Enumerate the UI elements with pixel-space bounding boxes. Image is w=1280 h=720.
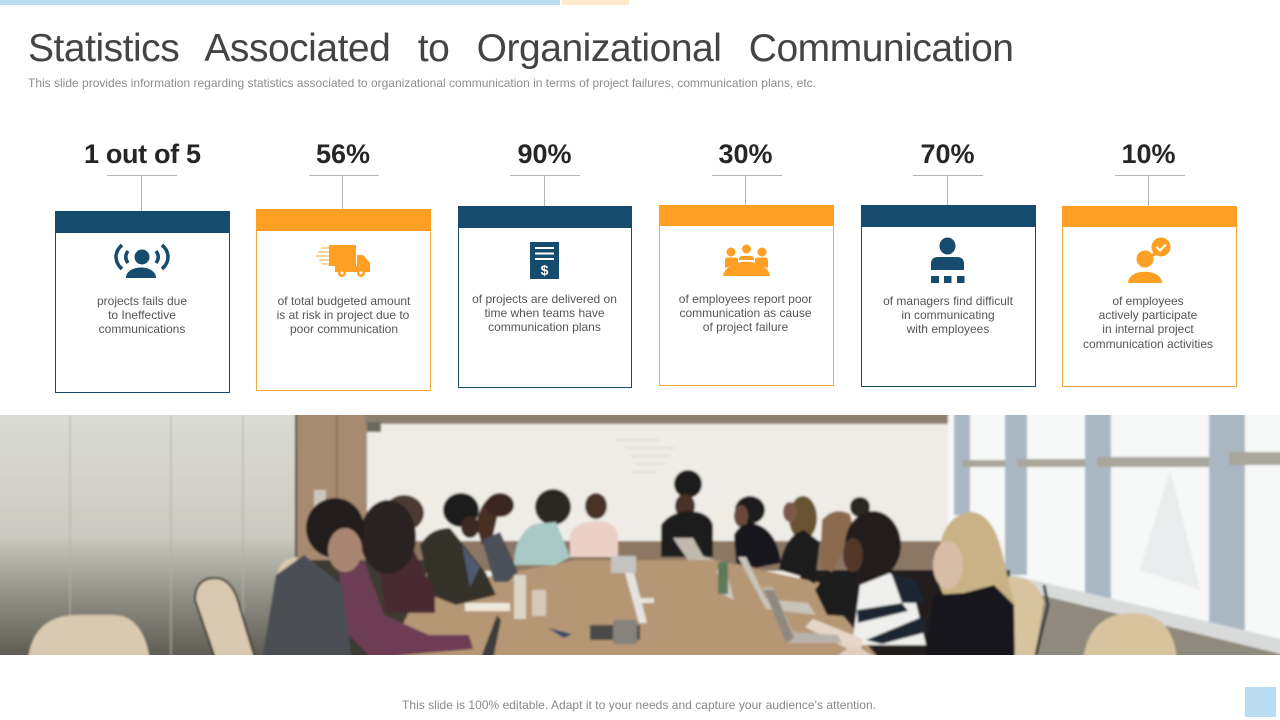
- panel: stat 30%: [659, 139, 834, 386]
- icon: person broadcasting: [116, 245, 168, 278]
- description: communication activities: [1083, 337, 1213, 351]
- icon: employee with check bubble: [1128, 238, 1170, 283]
- description: of employees report poor: [679, 292, 812, 306]
- connector: [712, 176, 782, 205]
- laptops right: [716, 570, 734, 600]
- card: [659, 205, 834, 386]
- stat value: 30%: [718, 139, 773, 169]
- connector: [510, 176, 580, 206]
- title: Statistics Associated to Organizational Communication: [28, 27, 1014, 70]
- window wall: [948, 410, 1280, 660]
- top accent bars: [0, 0, 629, 5]
- connector: [309, 176, 379, 209]
- panel: stat 10%: [1062, 139, 1237, 386]
- description: of employees: [1112, 294, 1184, 308]
- stat value: 56%: [316, 139, 370, 169]
- description: with employees: [906, 322, 989, 336]
- stat value: 10%: [1121, 139, 1176, 169]
- icon: invoice document: $: [541, 262, 549, 278]
- description: projects fails due: [97, 294, 187, 308]
- description: to Ineffective: [108, 308, 176, 322]
- icon: team around table: [723, 244, 770, 276]
- connector: [107, 176, 177, 211]
- table surface: [385, 560, 880, 660]
- card: [1062, 206, 1237, 386]
- items on table left: [465, 603, 510, 611]
- people far left side: [585, 493, 607, 519]
- rail and dark lower wall behind people: [367, 541, 948, 571]
- card: [458, 206, 632, 388]
- photo: team meeting around conference table: [0, 410, 1280, 660]
- description: communication as cause: [679, 306, 812, 320]
- description: in internal project: [1102, 322, 1194, 336]
- stat value: 1 out of 5: [84, 139, 201, 169]
- connector: [913, 176, 983, 205]
- panel: stat 70%: [861, 139, 1036, 386]
- panel: stat 56%: [256, 139, 431, 390]
- description: communications: [99, 322, 185, 336]
- icon: delivery truck: [316, 245, 370, 277]
- description: communication plans: [488, 320, 601, 334]
- description: of projects are delivered on: [472, 292, 617, 306]
- panel: stat 90%: [458, 139, 632, 388]
- corner square: [1245, 687, 1276, 717]
- people right side: [674, 470, 702, 498]
- description: of total budgeted amount: [278, 294, 410, 308]
- footer note: This slide is 100% editable. Adapt it to your needs and capture your audience's attention.: [402, 698, 876, 712]
- panel: stat 1 out of 5: [55, 139, 230, 392]
- card: [256, 209, 431, 390]
- stat value: 90%: [517, 139, 572, 169]
- description: of project failure: [703, 320, 789, 334]
- description: of managers find difficult: [883, 294, 1013, 308]
- chairs: [28, 615, 150, 660]
- icon: invoice document: [530, 242, 559, 279]
- description: poor communication: [290, 322, 398, 336]
- description: in communicating: [901, 308, 995, 322]
- description: time when teams have: [484, 306, 605, 320]
- icon: manager presenting: [931, 238, 964, 283]
- description: is at risk in project due to: [277, 308, 410, 322]
- description: actively participate: [1099, 308, 1198, 322]
- card: [861, 205, 1036, 386]
- subtitle: This slide provides information regarding statistics associated to organizational communication in terms of project failures, communication plans, etc.: [28, 76, 816, 90]
- connector: [1115, 176, 1185, 206]
- card: [55, 211, 230, 392]
- stat value: 70%: [920, 139, 975, 169]
